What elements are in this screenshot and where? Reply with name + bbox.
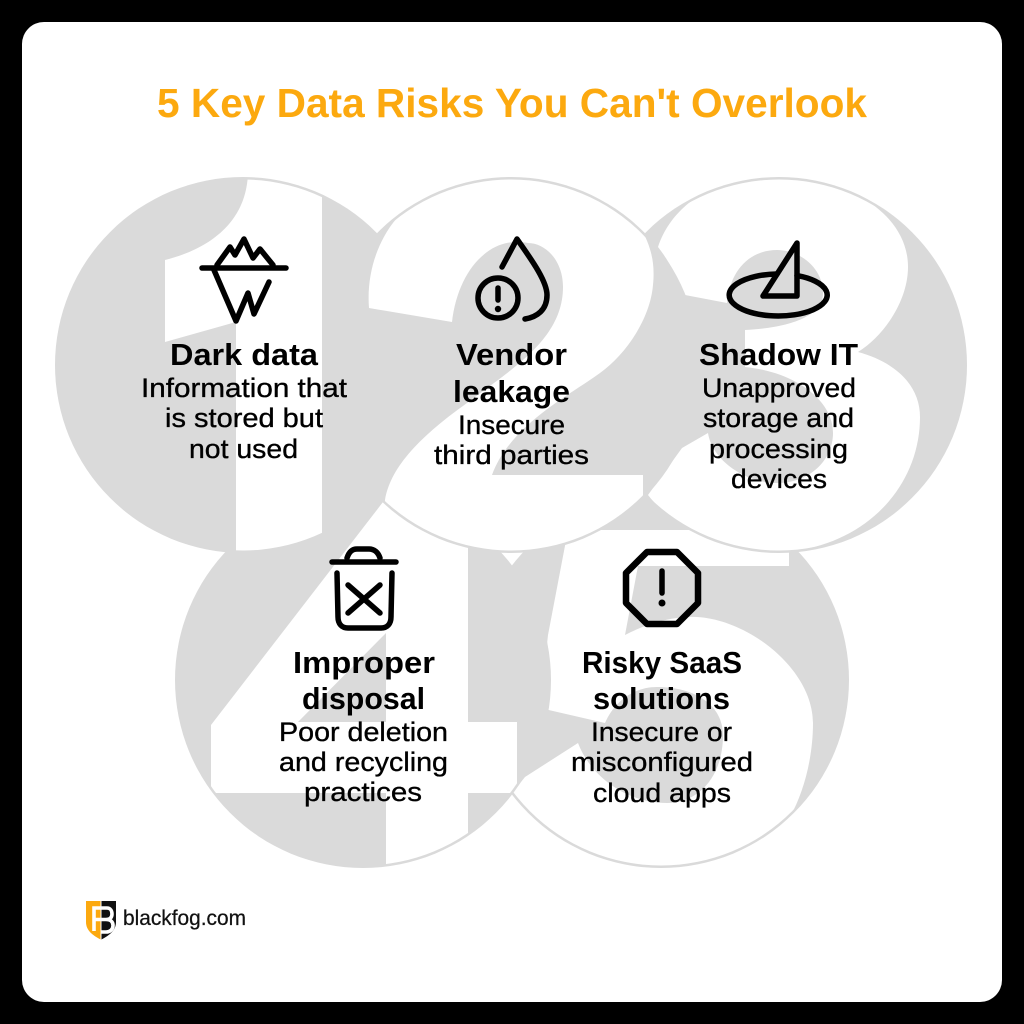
text: risky SaaS description: misconfigured xyxy=(571,747,753,777)
icon: sundial shadow xyxy=(729,243,827,316)
text: improper disposal description: and recycling xyxy=(279,747,448,777)
text: risky SaaS description: Insecure or xyxy=(591,717,732,747)
text: vendor leakage description xyxy=(434,410,589,470)
text: improper disposal description: Poor deletion xyxy=(279,717,448,747)
text: improper disposal description: practices xyxy=(304,777,422,807)
heading: improper disposal: disposal xyxy=(302,681,425,716)
heading: vendor leakage: leakage xyxy=(453,374,570,409)
panel: improper disposal xyxy=(279,549,448,807)
text: shadow IT description: Unapproved xyxy=(702,373,856,403)
panel: risky SaaS solutions xyxy=(571,552,753,808)
text: risky SaaS description: cloud apps xyxy=(593,778,731,808)
heading: vendor leakage xyxy=(453,337,570,409)
text: shadow IT description xyxy=(702,373,856,494)
text: shadow IT description: processing xyxy=(709,434,848,464)
numeral 1 circle xyxy=(55,177,377,552)
icon: iceberg xyxy=(202,239,286,321)
icon: leaking drop with alert xyxy=(478,239,547,319)
text: dark data description: Information that xyxy=(141,373,348,403)
icon: trash can with cross xyxy=(332,549,396,628)
text: dark data description: not used xyxy=(189,434,298,464)
text: vendor leakage description: third parties xyxy=(434,440,589,470)
heading: risky SaaS solutions: Risky SaaS xyxy=(582,645,742,680)
text: improper disposal description xyxy=(279,717,448,807)
heading: improper disposal: Improper xyxy=(293,645,435,680)
panel: vendor leakage xyxy=(434,239,589,470)
heading: shadow IT: Shadow IT xyxy=(699,337,858,372)
numeral 4 circle xyxy=(175,480,551,880)
icon: warning octagon xyxy=(626,552,698,624)
panel: dark data xyxy=(141,239,348,464)
heading: dark data: Dark data xyxy=(170,337,319,372)
title: 5 Key Data Risks You Can't Overlook xyxy=(157,80,867,126)
numeral 3 circle xyxy=(645,177,967,553)
text: dark data description xyxy=(141,373,348,464)
heading: risky SaaS solutions: solutions xyxy=(593,681,730,716)
logo: blackfog xyxy=(86,901,246,940)
icon: shield xyxy=(86,901,116,940)
text: risky SaaS description xyxy=(571,717,753,808)
numeral 2 circle xyxy=(368,177,686,553)
heading: improper disposal xyxy=(293,645,435,716)
text: shadow IT description: devices xyxy=(731,464,827,494)
panel: shadow IT xyxy=(699,243,858,494)
text: blackfog.com: blackfog.com xyxy=(123,906,246,930)
heading: risky SaaS solutions xyxy=(582,645,742,716)
heading: vendor leakage: Vendor xyxy=(456,337,567,372)
text: dark data description: is stored but xyxy=(165,403,324,433)
text: vendor leakage description: Insecure xyxy=(458,410,565,440)
text: shadow IT description: storage and xyxy=(703,403,854,433)
numeral 5 circle xyxy=(512,497,849,868)
